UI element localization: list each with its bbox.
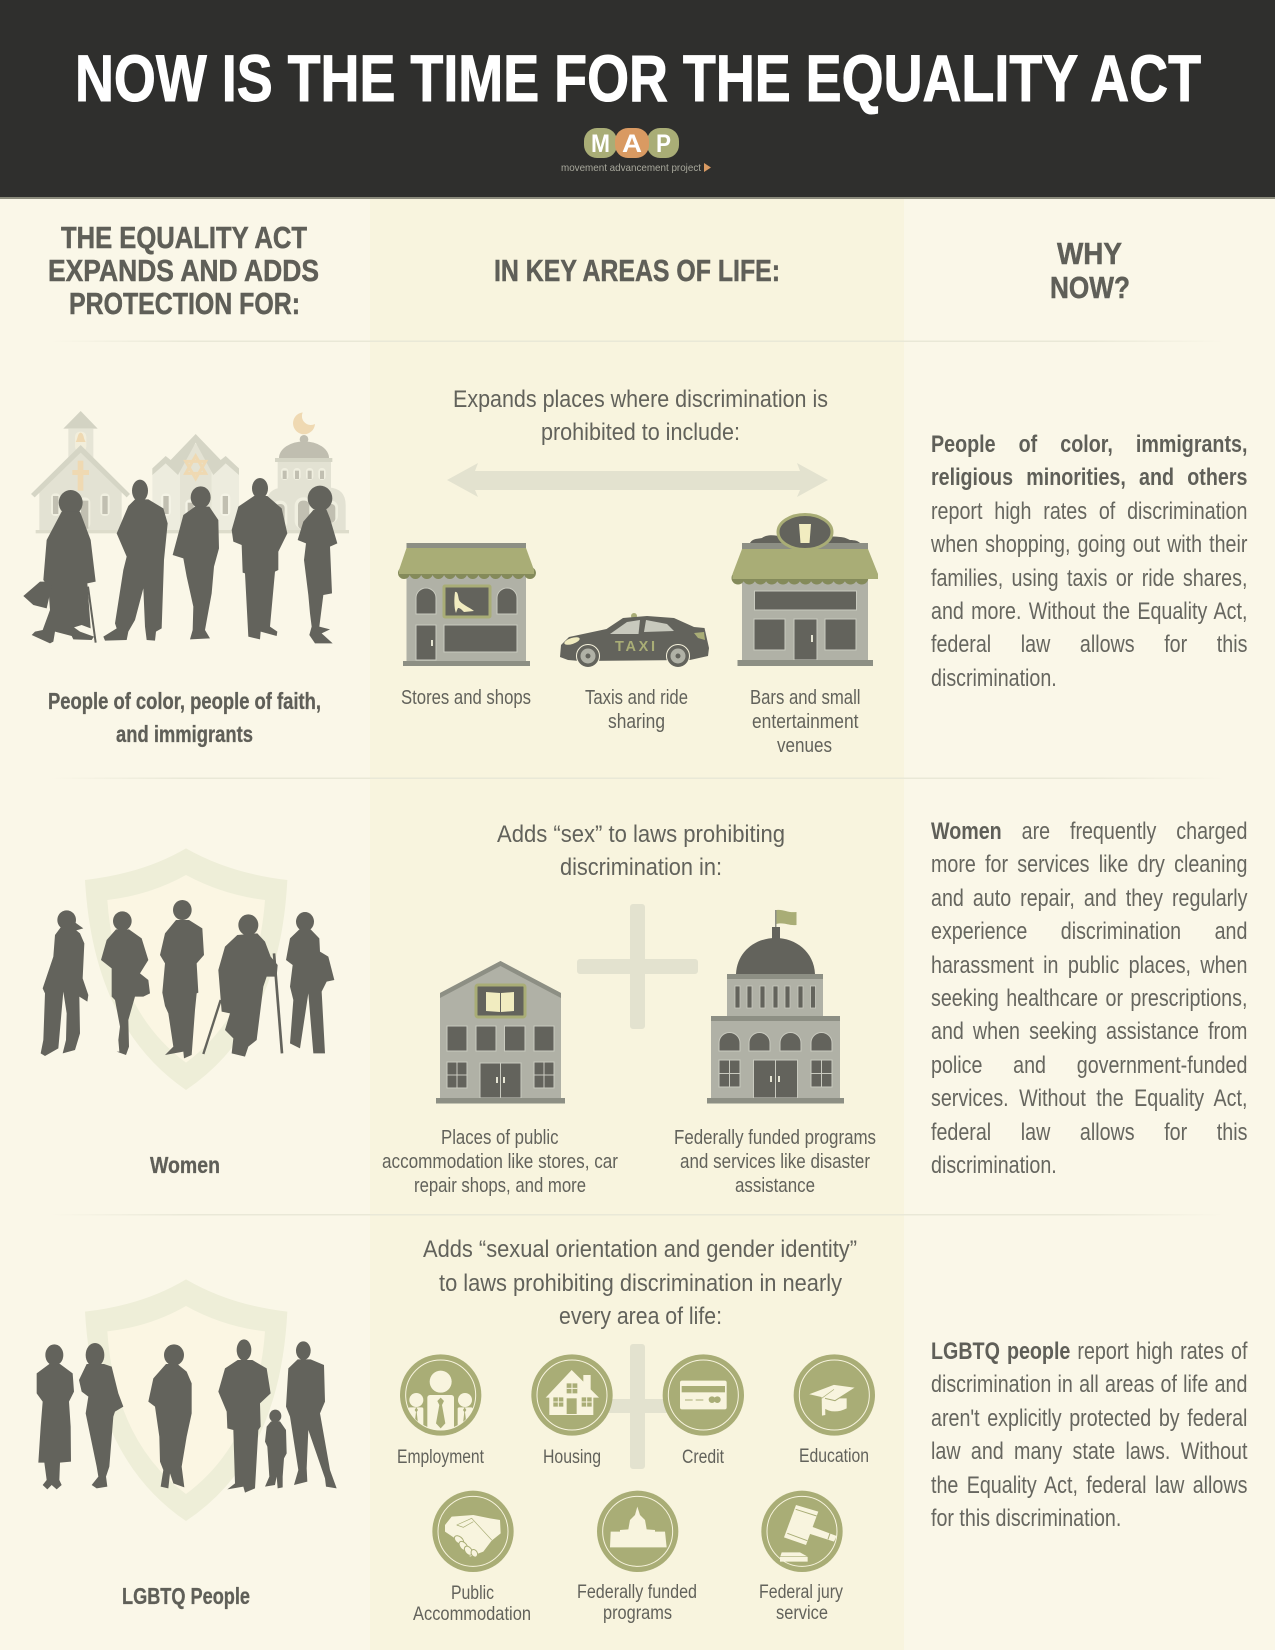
text block: why now, women: and auto repair, and they regularly bbox=[931, 885, 1247, 912]
label: federally funded programs: assistance bbox=[735, 1175, 815, 1197]
logo: MAP: A bbox=[622, 130, 642, 158]
intro: expands places bbox=[453, 386, 828, 446]
label: federally funded programs bbox=[674, 1127, 876, 1197]
column heading: the equality act expands: THE EQUALITY ACT bbox=[61, 220, 307, 255]
intro: adds sexual orientation bbox=[423, 1236, 857, 1330]
label: housing: Housing bbox=[543, 1447, 601, 1468]
text block: why now, women: discrimination. bbox=[931, 1152, 1056, 1179]
text block: why now, people of color bbox=[931, 431, 1248, 692]
label: employment: Employment bbox=[397, 1447, 485, 1468]
text block: why now, people of color: religious minorities, and others bbox=[931, 464, 1247, 491]
label: federally funded programs: Federally funded bbox=[577, 1582, 697, 1603]
plus sign bbox=[577, 904, 698, 1029]
silhouettes: women bbox=[41, 900, 334, 1058]
icon row: areas of life bbox=[400, 1354, 875, 1572]
double-headed arrow bbox=[447, 463, 828, 497]
label: credit: Credit bbox=[682, 1447, 725, 1468]
icon: bar bbox=[732, 514, 878, 666]
intro: adds sex: Adds “sex” to laws prohibiting bbox=[497, 821, 785, 848]
icon: employment bbox=[400, 1354, 481, 1436]
text block: why now, people of color: discrimination. bbox=[931, 665, 1056, 692]
icon: federally funded programs bbox=[597, 1491, 678, 1572]
column heading: why now: WHY bbox=[1057, 236, 1122, 271]
label: taxis and ride sharing: Taxis and ride bbox=[585, 687, 688, 709]
intro: adds sex: discrimination in: bbox=[560, 854, 722, 881]
caption: women: Women bbox=[150, 1152, 220, 1178]
text block: why now, women bbox=[931, 818, 1248, 1179]
text block: why now, women: experience discrimination and bbox=[931, 918, 1247, 945]
label: public accommodation: Accommodation bbox=[413, 1604, 531, 1625]
text block: why now, people of color: federal law allows for this bbox=[931, 631, 1247, 658]
icon: taxi: TAXI bbox=[615, 639, 655, 655]
text block: why now, LGBTQ people bbox=[931, 1338, 1248, 1532]
intro: adds sexual orientation: to laws prohibiting discrimination in nearly bbox=[439, 1270, 842, 1297]
caption: LGBTQ people: LGBTQ People bbox=[122, 1583, 250, 1609]
logo: MAP: M bbox=[591, 130, 610, 158]
text block: why now, people of color: and more. Without the Equality Act, bbox=[931, 598, 1247, 625]
synagogue bbox=[152, 434, 239, 530]
column heading: the equality act expands bbox=[48, 220, 319, 321]
label: places of public accommodation bbox=[382, 1127, 618, 1197]
label: public accommodation bbox=[413, 1583, 531, 1625]
text block: why now, women: services. Without the Equality Act, bbox=[931, 1085, 1247, 1112]
text block: why now, women: Women are frequently charged bbox=[931, 818, 1247, 845]
logo: MAP: movement advancement project bbox=[561, 162, 701, 174]
intro: expands places: prohibited to include: bbox=[541, 419, 740, 446]
header banner bbox=[0, 0, 1275, 199]
text block: why now, women: more for services like dry cleaning bbox=[931, 851, 1247, 878]
center column band bbox=[370, 198, 904, 1650]
icon: taxi bbox=[560, 613, 709, 668]
caption: people of color bbox=[48, 688, 321, 747]
label: bars: entertainment bbox=[752, 711, 859, 733]
label: bars: Bars and small bbox=[750, 687, 860, 709]
text block: why now, LGBTQ people: law and many state laws. Without bbox=[931, 1438, 1247, 1465]
intro: expands places: Expands places where discrimination is bbox=[453, 386, 828, 413]
icon: public accommodation building bbox=[436, 961, 565, 1104]
icon: housing bbox=[531, 1354, 613, 1436]
column heading: why now: NOW? bbox=[1050, 270, 1130, 305]
silhouettes: LGBTQ people bbox=[37, 1339, 337, 1493]
label: federal jury service: service bbox=[776, 1603, 828, 1624]
icon: store bbox=[399, 543, 534, 666]
shield: women bbox=[85, 848, 287, 1090]
label: public accommodation: Public bbox=[451, 1583, 494, 1604]
label: education: Education bbox=[799, 1446, 869, 1467]
text block: why now, LGBTQ people: discrimination in all areas of life and bbox=[931, 1371, 1247, 1398]
label: stores and shops: Stores and shops bbox=[401, 687, 531, 709]
label: taxis and ride sharing: sharing bbox=[608, 711, 665, 733]
intro: adds sexual orientation: Adds “sexual orientation and gender identity” bbox=[423, 1236, 857, 1263]
text block: why now, LGBTQ people: the Equality Act, federal law allows bbox=[931, 1472, 1247, 1499]
text block: why now, women: police and government-funded bbox=[931, 1052, 1247, 1079]
logo: MAP: P bbox=[656, 130, 671, 158]
text block: why now, LGBTQ people: aren't explicitly protected by federal bbox=[931, 1405, 1247, 1432]
label: federally funded programs: programs bbox=[603, 1603, 672, 1624]
shield: LGBTQ bbox=[85, 1279, 287, 1521]
label: places of public accommodation: repair shops, and more bbox=[414, 1175, 586, 1197]
label: federally funded programs: Federally funded programs bbox=[674, 1127, 876, 1149]
icon: education bbox=[794, 1354, 875, 1436]
label: taxis and ride sharing bbox=[585, 687, 688, 733]
mosque bbox=[267, 412, 346, 530]
column heading: the equality act expands: PROTECTION FOR: bbox=[69, 286, 300, 321]
label: federally funded programs: and services like disaster bbox=[680, 1151, 870, 1173]
text block: why now, women: harassment in public places, when bbox=[931, 952, 1247, 979]
intro: adds sexual orientation: every area of life: bbox=[559, 1303, 722, 1330]
text block: why now, women: federal law allows for this bbox=[931, 1119, 1247, 1146]
icon: capitol building bbox=[707, 910, 844, 1104]
text block: why now, LGBTQ people: LGBTQ people report high rates of bbox=[931, 1338, 1247, 1365]
column heading: why now bbox=[1050, 236, 1130, 305]
text block: why now, women: and when seeking assistance from bbox=[931, 1018, 1247, 1045]
label: bars: venues bbox=[777, 735, 832, 757]
text block: why now, women: seeking healthcare or prescriptions, bbox=[931, 985, 1247, 1012]
text block: why now, people of color: People of color, immigrants, bbox=[931, 431, 1247, 458]
icon: public accommodation bbox=[432, 1491, 514, 1572]
silhouettes: people of color, people of faith, immigrants bbox=[23, 478, 337, 643]
caption: people of color: and immigrants bbox=[116, 721, 253, 747]
plus sign bbox=[577, 1344, 698, 1469]
caption: people of color: People of color, people of faith, bbox=[48, 688, 321, 714]
icon: credit bbox=[663, 1354, 744, 1436]
illustration: houses of worship bbox=[31, 411, 349, 533]
label: federal jury service: Federal jury bbox=[759, 1582, 843, 1603]
column heading: in key areas of life: IN KEY AREAS OF LIFE: bbox=[494, 253, 780, 288]
text block: why now, LGBTQ people: for this discrimination. bbox=[931, 1505, 1121, 1532]
intro: adds sex bbox=[497, 821, 785, 881]
text block: why now, people of color: families, using taxis or ride shares, bbox=[931, 565, 1247, 592]
church bbox=[31, 411, 130, 530]
label: places of public accommodation: Places of public bbox=[441, 1127, 558, 1149]
label: places of public accommodation: accommodation like stores, car bbox=[382, 1151, 618, 1173]
label: bars bbox=[750, 687, 860, 757]
label: federally funded programs bbox=[577, 1582, 697, 1624]
logo: MAP bbox=[561, 128, 711, 174]
text block: why now, people of color: when shopping, going out with their bbox=[931, 531, 1247, 558]
label: federal jury service bbox=[759, 1582, 843, 1624]
column heading: the equality act expands: EXPANDS AND ADDS bbox=[48, 253, 319, 288]
icon: federal jury service bbox=[761, 1491, 843, 1572]
text block: why now, people of color: report high rates of discrimination bbox=[931, 498, 1247, 525]
